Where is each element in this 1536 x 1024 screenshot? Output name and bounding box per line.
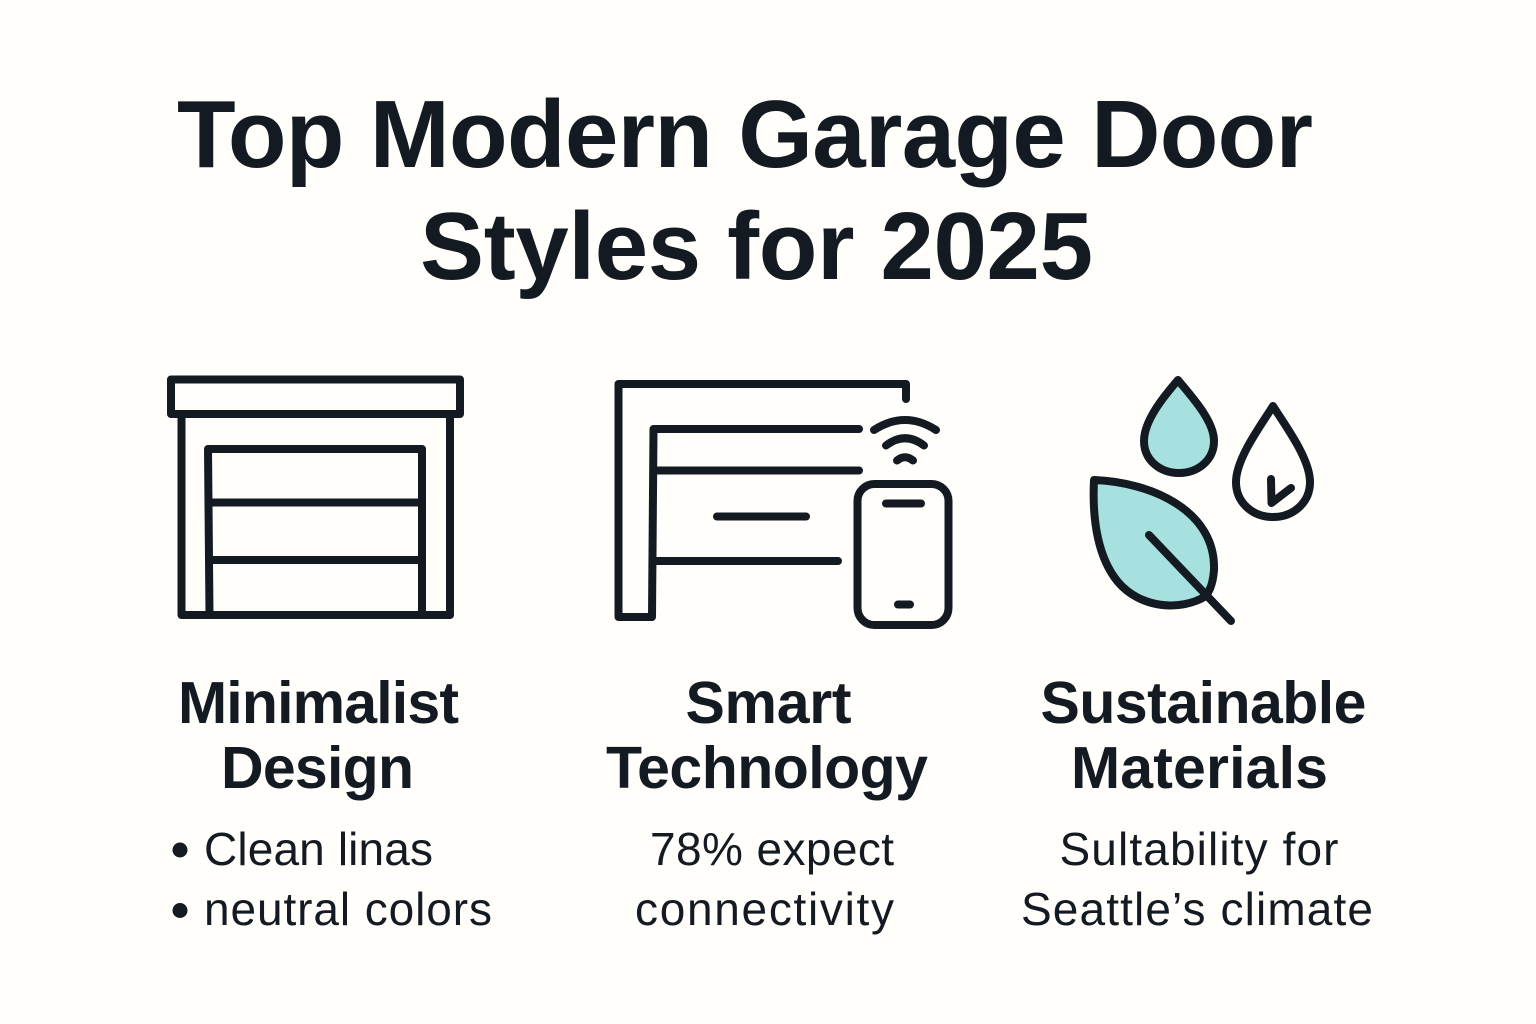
heading: sustainable materials: Sustainable [1040,670,1366,736]
heading: smart technology [606,670,928,801]
text: connectivity statistic: connectivity [635,883,894,935]
bullet list: minimalist design: Clean linas [204,823,433,875]
heading: sustainable materials [1040,670,1366,801]
icon: leaf and water drops [1094,380,1310,621]
heading: minimalist design: Minimalist [178,670,459,736]
text: connectivity statistic [635,823,894,935]
text: climate suitability [1021,823,1373,935]
panel: minimalist design [171,380,492,935]
text: climate suitability: Sultability for [1060,823,1338,875]
heading: sustainable materials: Materials [1071,735,1328,801]
icon: smart garage door with phone [618,384,948,625]
panel: sustainable materials [1021,380,1373,935]
title [177,81,1313,300]
heading: minimalist design [178,670,459,801]
heading: minimalist design: Design [221,735,414,801]
text: climate suitability: Seattle’s climate [1021,883,1373,935]
heading: smart technology: Smart [686,670,852,736]
icon: garage door [171,380,460,615]
bullet list: minimalist design [172,823,492,935]
title: Styles for 2025 [420,193,1093,300]
panel: smart technology [606,384,948,935]
heading: smart technology: Technology [606,735,928,801]
text: connectivity statistic: 78% expect [650,823,894,875]
title: Top Modern Garage Door [177,81,1313,188]
bullet list: minimalist design: neutral colors [204,883,492,935]
